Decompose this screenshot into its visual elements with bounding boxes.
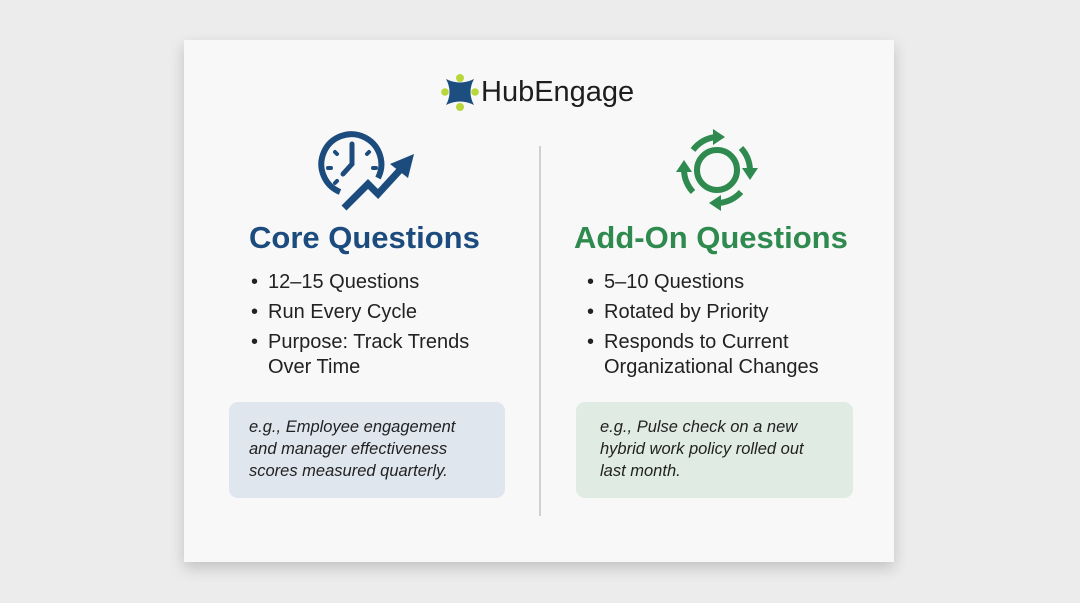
- list: core: 12–15 Questions: [268, 271, 419, 293]
- list: core: [252, 271, 469, 378]
- list: add-on: [588, 271, 819, 378]
- callout: core example: e.g., Employee engagement and manager effectiveness scores measured quarterly.: [249, 418, 455, 480]
- heading: core: Core Questions: [249, 220, 480, 255]
- icon: cycle arrows: [676, 129, 758, 211]
- icon: clock with arrow: [318, 131, 414, 210]
- card panel: [184, 40, 894, 562]
- list: core: Run Every Cycle: [268, 301, 417, 323]
- list: add-on: Responds to Current Organizational Changes: [604, 331, 819, 378]
- panel: add-on: [574, 129, 853, 498]
- list: core: Purpose: Track Trends Over Time: [268, 331, 469, 378]
- callout: add-on example: [576, 402, 853, 498]
- panel: core: [229, 131, 505, 498]
- logo: [441, 74, 634, 111]
- list: add-on: Rotated by Priority: [604, 301, 769, 323]
- icon: logo mark: [441, 74, 479, 111]
- divider: [539, 146, 541, 516]
- logo text: HubEngage: [481, 76, 634, 108]
- callout: add-on example: e.g., Pulse check on a new hybrid work policy rolled out last month.: [600, 418, 804, 480]
- callout: core example: [229, 402, 505, 498]
- list: add-on: 5–10 Questions: [604, 271, 744, 293]
- heading: add-on: Add-On Questions: [574, 220, 848, 255]
